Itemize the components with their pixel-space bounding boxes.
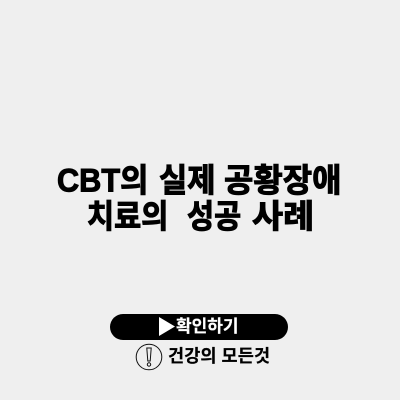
- title: 치료의: [87, 198, 168, 235]
- icon: exclamation circle: [136, 344, 162, 370]
- title: CBT의: [57, 162, 148, 199]
- title: 공황장애: [224, 162, 342, 199]
- brand text: 건강의 모든것: [168, 346, 270, 366]
- title: [57, 162, 342, 235]
- title: 성공: [187, 198, 241, 235]
- title: 사례: [252, 198, 314, 235]
- button label: 확인하기: [176, 317, 239, 336]
- play triangle: [159, 317, 175, 336]
- title: 실제: [159, 162, 215, 199]
- button: 확인하기: [110, 314, 288, 340]
